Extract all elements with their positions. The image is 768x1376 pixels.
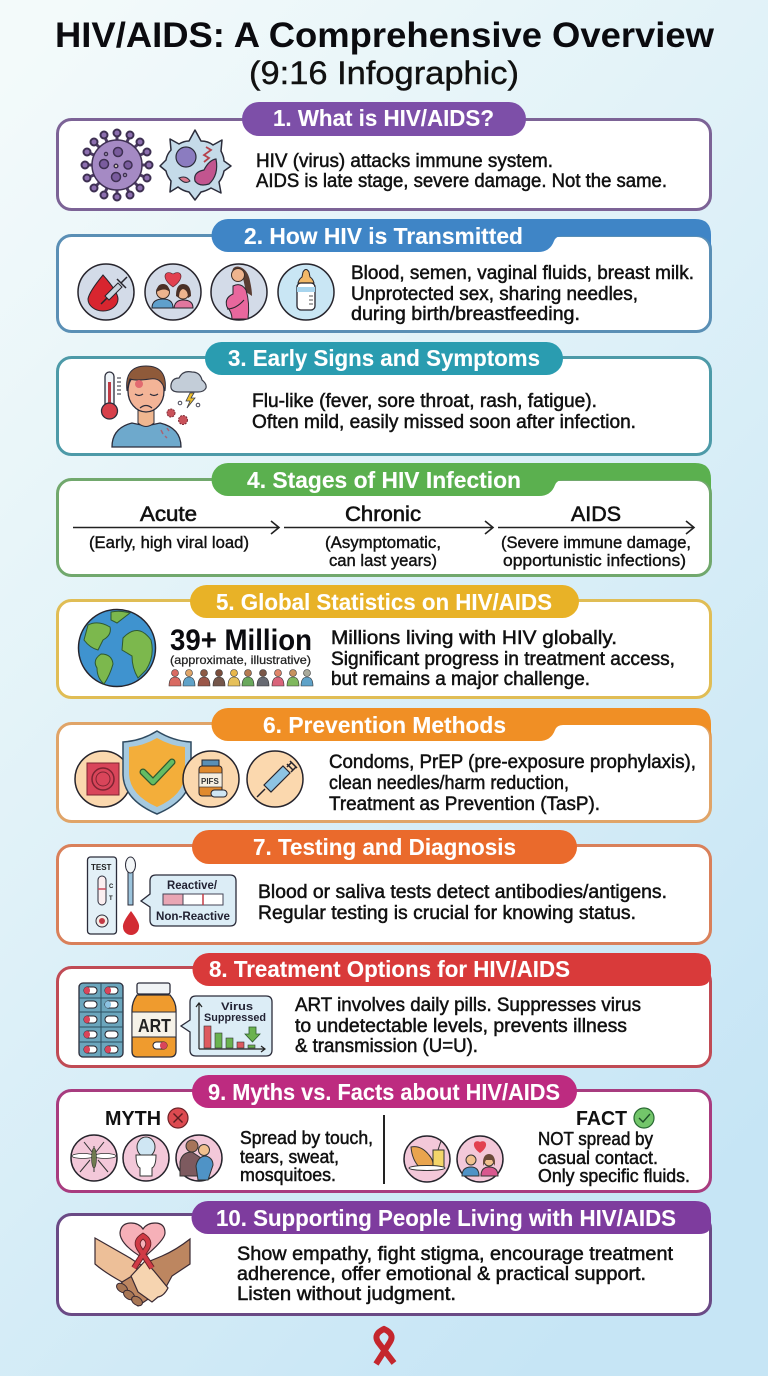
- fact label: FACT: [576, 1108, 627, 1130]
- panel: 10 Supporting People: [58, 1201, 711, 1314]
- icon: test cassette: TEST: [91, 863, 112, 872]
- text block 10: adherence, offer emotional & practical support.: [237, 1264, 646, 1285]
- heading pill 1: [242, 102, 526, 136]
- panel: 3 Early Signs and Symptoms: [58, 342, 710, 454]
- heading 8: 8. Treatment Options for HIV/AIDS: [209, 956, 570, 982]
- text block 3: Often mild, easily missed soon after infection.: [252, 412, 636, 433]
- stage: Acute: Acute: [140, 503, 197, 526]
- icon: condom: [75, 751, 131, 807]
- text block 8: & transmission (U=U).: [295, 1036, 478, 1057]
- text block myth: [240, 1128, 373, 1185]
- heading 1: 1. What is HIV/AIDS?: [273, 105, 494, 131]
- panel: 8 Treatment Options: [58, 953, 711, 1066]
- text block 6: clean needles/harm reduction,: [329, 773, 569, 794]
- heading 10: 10. Supporting People Living with HIV/AIDS: [216, 1205, 676, 1231]
- heading pill 7: [192, 830, 577, 864]
- heading 2: 2. How HIV is Transmitted: [244, 223, 523, 249]
- text block 8: [295, 995, 641, 1057]
- text block myth: Spread by touch,: [240, 1128, 373, 1148]
- text block myth: tears, sweat,: [240, 1147, 339, 1167]
- icon: couple: [145, 264, 201, 320]
- icon: red ribbon: [376, 1329, 394, 1364]
- icon: couple with heart: [457, 1136, 503, 1182]
- text block 10: Show empathy, fight stigma, encourage treatment: [237, 1244, 674, 1265]
- icon: syringe: [247, 751, 303, 807]
- people row: [169, 670, 313, 686]
- text block 8: ART involves daily pills. Suppresses virus: [295, 995, 641, 1016]
- panel: 4 Stages of HIV Infection: [58, 463, 711, 576]
- heading band 6: [212, 708, 711, 741]
- text block fact: NOT spread by: [538, 1129, 653, 1149]
- heading band 4: [212, 463, 711, 496]
- text block 3: Flu-like (fever, sore throat, rash, fatigue).: [252, 391, 597, 412]
- text block 2: during birth/breastfeeding.: [351, 304, 580, 325]
- text block 7: Regular testing is crucial for knowing status.: [258, 903, 636, 924]
- heading 7: 7. Testing and Diagnosis: [253, 834, 516, 860]
- icon: virus suppressed chart: [181, 996, 272, 1056]
- stage: AIDS: (Severe immune damage,: [501, 534, 691, 552]
- text block 6: Treatment as Prevention (TasP).: [329, 794, 600, 815]
- panel: 1 What is HIV/AIDS: [58, 102, 710, 210]
- title: HIV/AIDS: A Comprehensive Overview: [55, 16, 715, 55]
- heading 9: 9. Myths vs. Facts about HIV/AIDS: [208, 1079, 560, 1105]
- caption: (approximate, illustrative): [170, 653, 311, 667]
- heading 5: 5. Global Statistics on HIV/AIDS: [216, 589, 552, 615]
- icon: hug: [176, 1135, 222, 1181]
- icon: result callout: Non-Reactive: [156, 911, 230, 923]
- icon: globe: [78, 610, 156, 686]
- icon: sick person: [112, 366, 181, 447]
- big number: 39+ Million: [170, 624, 312, 657]
- heading 6: 6. Prevention Methods: [263, 712, 506, 738]
- icon: storm cloud and rash: [167, 372, 206, 424]
- icon: swab and blood drop: [123, 857, 139, 935]
- text block 3: [252, 391, 636, 433]
- icon: blister pack: [79, 983, 123, 1057]
- text block 1: AIDS is late stage, severe damage. Not the same.: [256, 171, 667, 192]
- heading band 2: [212, 219, 711, 252]
- icon: result callout: [141, 875, 236, 926]
- text block myth: mosquitoes.: [240, 1165, 336, 1185]
- heading pill 9: [192, 1075, 577, 1108]
- panel: 6 Prevention Methods: [58, 708, 711, 822]
- icon: shield with check: [123, 731, 191, 814]
- stage: AIDS: opportunistic infections): [503, 552, 686, 570]
- heading 3: 3. Early Signs and Symptoms: [228, 345, 540, 371]
- heading 4: 4. Stages of HIV Infection: [247, 467, 521, 493]
- myth label: MYTH: [105, 1108, 161, 1130]
- stage: Acute: [73, 503, 279, 552]
- text block 2: [351, 263, 694, 325]
- icon: virus suppressed chart: Virus: [221, 1001, 253, 1013]
- icon: pregnant woman: [211, 264, 267, 320]
- stage: Acute: (Early, high viral load): [89, 534, 249, 552]
- icon: ART bottle: [132, 983, 176, 1057]
- stage: Chronic: Chronic: [345, 503, 421, 526]
- panel: 2 How HIV is Transmitted: [58, 219, 711, 332]
- text block 8: to undetectable levels, prevents illness: [295, 1016, 627, 1037]
- text block 5: [331, 628, 675, 690]
- text block 5: but remains a major challenge.: [331, 669, 590, 690]
- myth label: [105, 1108, 188, 1130]
- text block fact: Only specific fluids.: [538, 1166, 690, 1186]
- icon: result callout: Reactive/: [167, 880, 218, 892]
- icon: virus: [82, 130, 152, 200]
- text block 5: Significant progress in treatment access,: [331, 649, 675, 670]
- icon: mosquito: [71, 1135, 117, 1181]
- icon: PrEP bottle: [183, 751, 239, 807]
- text block fact: casual contact.: [538, 1148, 658, 1168]
- divider: [383, 1115, 385, 1184]
- panel: 9 Myths vs Facts: [58, 1075, 710, 1192]
- subtitle: (9:16 Infographic): [249, 55, 519, 91]
- icon: test cassette: [88, 857, 116, 934]
- heading band 10: [192, 1201, 711, 1234]
- stage: Chronic: [284, 503, 493, 570]
- panel: 7 Testing and Diagnosis: [58, 830, 710, 944]
- icon: test cassette: T: [109, 896, 113, 902]
- icon: blood and syringe: [78, 264, 134, 320]
- text block 6: [329, 752, 696, 815]
- icon: heart, ribbon and handshake: [95, 1223, 190, 1308]
- icon: ART bottle: ART: [138, 1016, 171, 1036]
- panel: 5 Global Statistics: [58, 585, 710, 698]
- text block 10: Listen without judgment.: [237, 1284, 456, 1305]
- text block 2: Blood, semen, vaginal fluids, breast milk.: [351, 263, 694, 284]
- text block 1: [256, 151, 667, 192]
- stage: Chronic: (Asymptomatic,: [325, 534, 441, 552]
- stage: AIDS: [498, 503, 694, 570]
- icon: virus suppressed chart: Suppressed: [204, 1012, 266, 1024]
- heading pill 5: [190, 585, 579, 618]
- fact label: [576, 1108, 654, 1130]
- heading band 8: [192, 953, 711, 986]
- icon: PrEP bottle: PIFS: [201, 777, 219, 786]
- text block fact: [538, 1129, 690, 1186]
- stage: AIDS: AIDS: [571, 503, 621, 526]
- icon: baby bottle: [278, 264, 334, 320]
- icon: test cassette: C: [109, 884, 114, 890]
- icon: immune cell: [160, 130, 231, 200]
- icon: toilet: [123, 1135, 169, 1181]
- text block 10: [237, 1244, 674, 1305]
- icon: shared food: [404, 1136, 450, 1182]
- stage: Chronic: can last years): [329, 552, 437, 570]
- heading pill 3: [205, 342, 563, 375]
- text block 6: Condoms, PrEP (pre-exposure prophylaxis),: [329, 752, 696, 773]
- text block 7: Blood or saliva tests detect antibodies/antigens.: [258, 882, 667, 903]
- text block 1: HIV (virus) attacks immune system.: [256, 151, 553, 172]
- text block 2: Unprotected sex, sharing needles,: [351, 284, 638, 305]
- text block 5: Millions living with HIV globally.: [331, 628, 617, 649]
- text block 7: [258, 882, 667, 924]
- icon: thermometer: [102, 372, 121, 419]
